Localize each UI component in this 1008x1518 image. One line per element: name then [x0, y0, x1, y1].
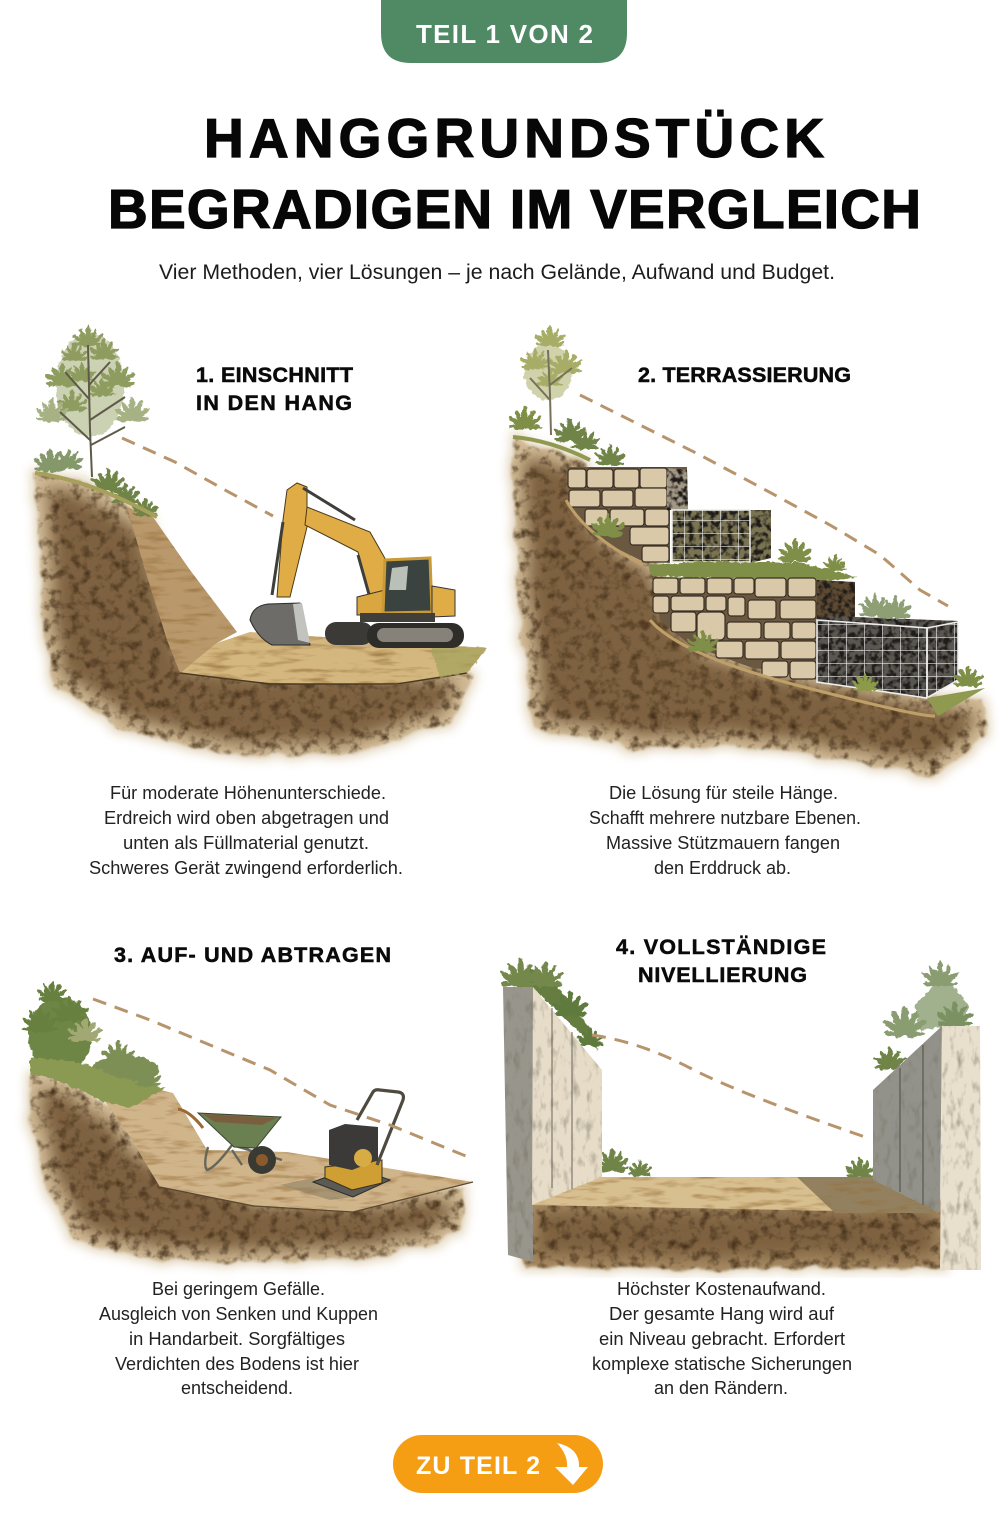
- header tab: part 1 of 2: [381, 0, 627, 63]
- levelled ground: [180, 632, 487, 685]
- dashed original slope line: [580, 395, 948, 606]
- panel 2: Terrassierung: [507, 325, 987, 878]
- excavator: [250, 483, 464, 648]
- heading 1: IN DEN HANG: [196, 391, 352, 415]
- cut slope: [127, 507, 237, 673]
- description 3: Ausgleich von Senken und Kuppen: [99, 1303, 378, 1324]
- illustration 4: bushes: [498, 959, 975, 1179]
- panel 3: Auf- und Abtragen: [20, 943, 473, 1398]
- heading 1: 1. EINSCHNITT: [196, 363, 353, 387]
- heading 1: [196, 363, 353, 415]
- description 2: Schafft mehrere nutzbare Ebenen.: [589, 807, 861, 828]
- header tab: part 1 of 2: TEIL 1 VON 2: [416, 19, 593, 49]
- lower gabion: [817, 616, 958, 698]
- description 2: [589, 782, 861, 878]
- description 1: [89, 782, 403, 878]
- button: to part 2: [393, 1435, 603, 1493]
- dashed original slope line: [122, 438, 273, 516]
- grass ledge: [648, 562, 858, 581]
- title: HANGGRUNDSTÜCK: [204, 107, 824, 169]
- upper gabion: [672, 510, 771, 563]
- description 1: Erdreich wird oben abgetragen und: [104, 807, 389, 828]
- description 3: [99, 1278, 378, 1398]
- description 1: Für moderate Höhenunterschiede.: [110, 782, 386, 803]
- heading 4: NIVELLIERUNG: [638, 963, 807, 987]
- left wall: [503, 987, 602, 1262]
- icon: curved arrow: [555, 1443, 588, 1485]
- ground edge and vegetation: [507, 325, 985, 716]
- description 3: Bei geringem Gefälle.: [152, 1278, 325, 1299]
- description 1: Schweres Gerät zwingend erforderlich.: [89, 857, 403, 878]
- heading 3: 3. AUF- UND ABTRAGEN: [114, 943, 391, 967]
- description 4: ein Niveau gebracht. Erfordert: [599, 1328, 845, 1349]
- grass and bushes: [20, 980, 165, 1108]
- plate compactor: [280, 1090, 403, 1200]
- description 3: in Handarbeit. Sorgfältiges: [129, 1328, 345, 1349]
- subtitle: Vier Methoden, vier Lösungen – je nach Gelände, Aufwand und Budget.: [159, 260, 835, 284]
- illustration 1: soil cross-section: [35, 475, 470, 755]
- illustration 3: soil cross-section: [30, 1073, 465, 1263]
- heading 2: 2. TERRASSIERUNG: [638, 363, 851, 387]
- heading 4: [616, 935, 826, 987]
- panel 1: Einschnitt in den Hang: [32, 325, 487, 878]
- description 3: Verdichten des Bodens ist hier: [115, 1353, 359, 1374]
- upper stone wall: [567, 467, 688, 563]
- description 1: unten als Füllmaterial genutzt.: [123, 832, 369, 853]
- button: to part 2: ZU TEIL 2: [416, 1452, 540, 1480]
- tree: [32, 325, 159, 517]
- soil layer: [525, 1200, 945, 1268]
- sandy surface: [103, 1085, 473, 1212]
- illustration 2: soil cross-section: [513, 437, 987, 777]
- right wall: [873, 1026, 981, 1270]
- title: [108, 107, 921, 240]
- lower stone wall: [652, 577, 855, 680]
- wheelbarrow: [178, 1109, 282, 1174]
- description 4: komplexe statische Sicherungen: [592, 1353, 852, 1374]
- description 4: Höchster Kostenaufwand.: [617, 1278, 826, 1299]
- levelled ground: [532, 1177, 938, 1213]
- heading 4: 4. VOLLSTÄNDIGE: [616, 935, 826, 959]
- title: BEGRADIGEN IM VERGLEICH: [108, 178, 921, 240]
- description 3: entscheidend.: [181, 1377, 293, 1398]
- description 2: den Erddruck ab.: [654, 857, 791, 878]
- dashed original slope line: [93, 999, 473, 1159]
- dashed original slope line: [592, 1035, 868, 1138]
- description 4: an den Rändern.: [654, 1377, 788, 1398]
- description 2: Die Lösung für steile Hänge.: [609, 782, 838, 803]
- description 4: Der gesamte Hang wird auf: [609, 1303, 835, 1324]
- panel 4: Vollständige Nivellierung: [498, 935, 981, 1398]
- description 4: [592, 1278, 852, 1398]
- description 2: Massive Stützmauern fangen: [606, 832, 840, 853]
